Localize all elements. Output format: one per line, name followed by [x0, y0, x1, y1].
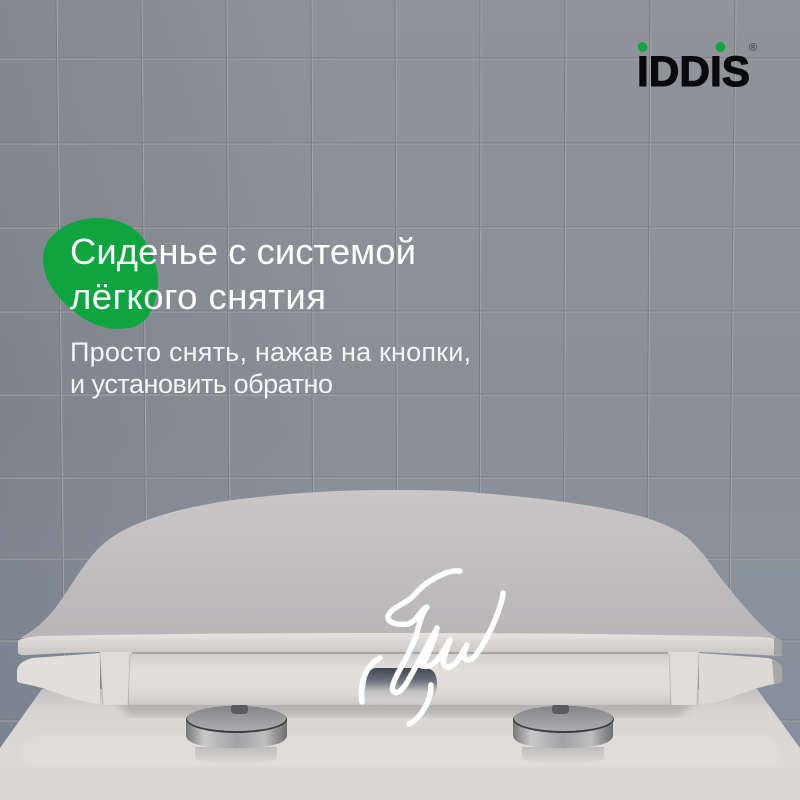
release button	[365, 668, 437, 702]
toilet base	[0, 689, 800, 800]
title: Сиденье с системой	[70, 231, 416, 272]
icon: hand pressing button	[361, 571, 503, 724]
subtitle: Просто снять, нажав на кнопки,	[70, 337, 471, 367]
title: лёгкого снятия	[70, 276, 326, 317]
green blob	[43, 218, 158, 329]
lid top	[20, 490, 777, 640]
logo green dots	[638, 42, 647, 52]
lid front rim	[18, 633, 782, 656]
seat middle rail	[129, 652, 670, 705]
title	[70, 231, 416, 317]
left hinge strap	[100, 652, 130, 705]
seat lower right end	[699, 653, 782, 704]
left chrome hinge post	[186, 704, 287, 763]
subtitle: и установить обратно	[70, 369, 333, 399]
right chrome hinge post	[513, 704, 614, 763]
arc left of button	[361, 658, 380, 702]
seat lower left end	[17, 653, 100, 704]
subtitle	[70, 337, 471, 399]
arc right of button	[409, 685, 431, 724]
logo registered mark: ®	[749, 42, 757, 54]
base recess reflection	[21, 735, 780, 766]
toilet seat	[17, 490, 782, 705]
right hinge strap	[669, 652, 699, 705]
logo: IDDIS: IDDIS	[637, 48, 750, 96]
